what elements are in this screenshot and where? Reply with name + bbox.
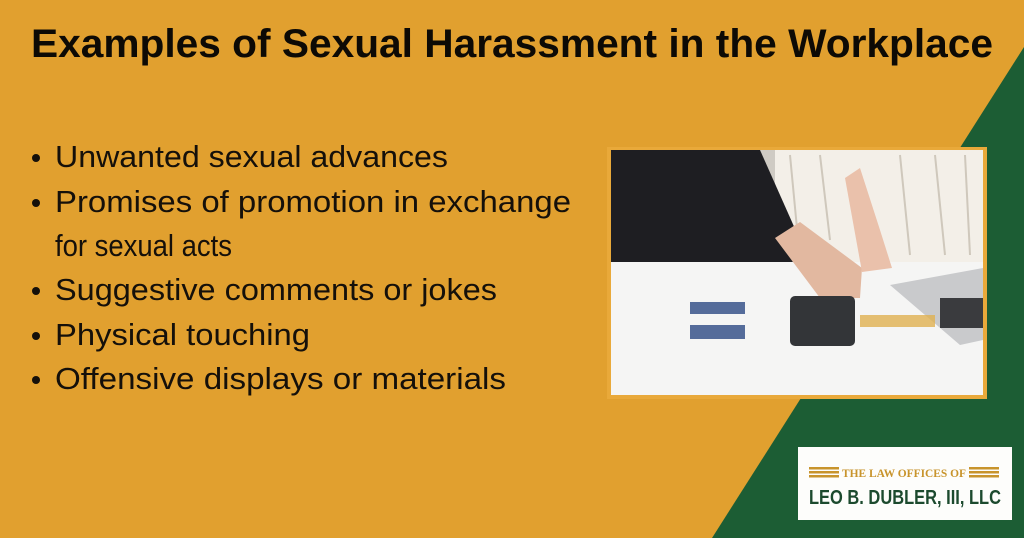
bullet 4: Physical touching bbox=[55, 317, 310, 352]
green diagonal panel bbox=[712, 47, 1024, 538]
title: Examples of Sexual Harassment in the Workplace bbox=[31, 22, 993, 66]
bullet 2: for sexual acts bbox=[55, 228, 232, 263]
logo box: THE LAW OFFICES OF bbox=[842, 466, 966, 480]
bullet 3: Suggestive comments or jokes bbox=[55, 272, 497, 307]
logo box bbox=[798, 447, 1012, 520]
bullet 1: Unwanted sexual advances bbox=[55, 139, 448, 174]
bullet 2: Promises of promotion in exchange bbox=[55, 184, 571, 219]
logo stripes left bbox=[809, 467, 839, 478]
photo: office harassment scene bbox=[607, 147, 987, 399]
bullet 2 bbox=[32, 184, 571, 263]
bullet list bbox=[32, 139, 571, 396]
logo stripes right bbox=[969, 467, 999, 478]
bullet 5: Offensive displays or materials bbox=[55, 361, 506, 396]
